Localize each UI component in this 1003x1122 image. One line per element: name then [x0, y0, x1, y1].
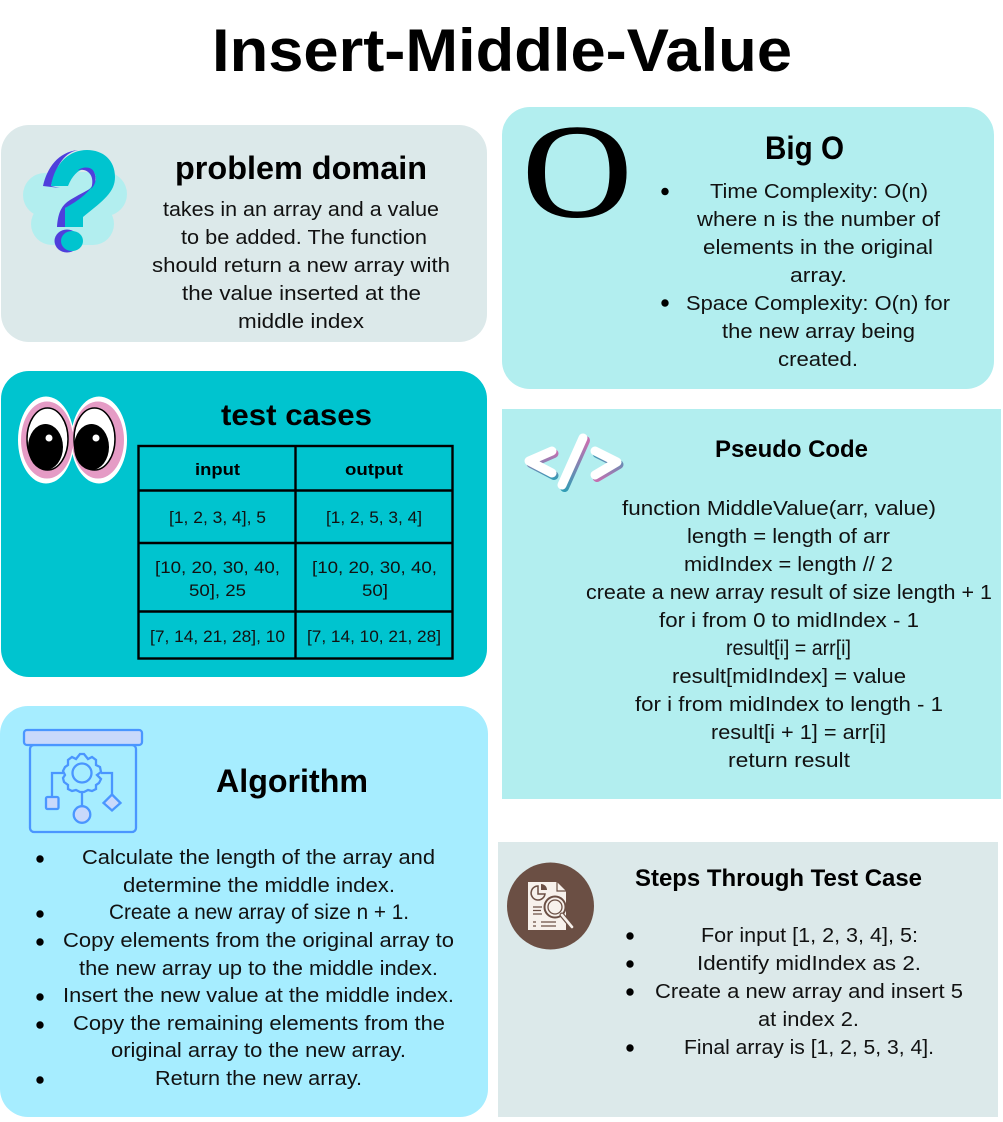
- heading: test cases: test cases: [221, 399, 372, 432]
- table: test cases: [1, 2, 3, 4], 5: [169, 509, 266, 527]
- table: test cases: 50]: [362, 582, 388, 600]
- icon: code brackets: [529, 438, 619, 488]
- text block: pseudo code: [586, 497, 992, 772]
- bullet list: algorithm steps: Copy elements from the original array to: [63, 929, 454, 952]
- panel: steps through test case: [498, 842, 998, 1117]
- bullet list: complexity: Space Complexity: O(n) for: [686, 292, 950, 315]
- table: test cases: [7, 14, 10, 21, 28]: [307, 628, 441, 646]
- bullet list: steps: Identify midIndex as 2.: [697, 952, 921, 975]
- heading: problem domain: problem domain: [175, 150, 427, 186]
- title: Insert-Middle-Value: [212, 17, 792, 84]
- bullet list: algorithm steps: [36, 846, 454, 1090]
- bullet list: steps: Final array is [1, 2, 5, 3, 4].: [684, 1036, 934, 1059]
- bullet list: complexity: [661, 180, 950, 371]
- bullet list: complexity: elements in the original: [703, 236, 933, 259]
- icon: question mark: [23, 150, 127, 252]
- text block: problem domain: should return a new array with: [152, 254, 450, 277]
- text block: pseudo code: for i from 0 to midIndex - 1: [659, 609, 919, 632]
- table: test cases: [138, 446, 453, 658]
- bullet list: steps: [626, 924, 963, 1059]
- panel: test cases: [1, 371, 487, 677]
- text block: pseudo code: result[i + 1] = arr[i]: [711, 721, 886, 744]
- table: test cases: input: [195, 461, 241, 479]
- text block: pseudo code: midIndex = length // 2: [684, 553, 893, 576]
- panel: problem domain: [1, 125, 487, 342]
- bullet list: complexity: the new array being: [722, 320, 915, 343]
- text block: pseudo code: function MiddleValue(arr, value): [622, 497, 936, 520]
- table: test cases: [1, 2, 5, 3, 4]: [326, 509, 422, 527]
- bullet list: algorithm steps: Calculate the length of the array and: [82, 846, 435, 869]
- text block: pseudo code: for i from midIndex to length - 1: [635, 693, 943, 716]
- table: test cases: 50], 25: [189, 582, 246, 600]
- panel: pseudo code: [502, 409, 1001, 799]
- heading: Big O: Big O: [765, 130, 844, 166]
- panel: algorithm: [0, 706, 488, 1117]
- icon: flowchart with gear: [24, 730, 142, 832]
- text block: problem domain: to be added. The function: [181, 226, 427, 249]
- text block: pseudo code: create a new array result of size length + 1: [586, 581, 992, 604]
- bullet list: complexity: array.: [790, 264, 847, 287]
- text block: pseudo code: result[i] = arr[i]: [726, 637, 851, 660]
- icon: big letter O: O: [522, 98, 632, 245]
- bullet list: algorithm steps: Insert the new value at the middle index.: [63, 984, 454, 1007]
- icon: eyes: [18, 396, 127, 484]
- bullet list: algorithm steps: determine the middle index.: [123, 874, 395, 897]
- table: test cases: output: [345, 461, 404, 479]
- bullet list: steps: For input [1, 2, 3, 4], 5:: [701, 924, 918, 947]
- bullet list: algorithm steps: original array to the new array.: [111, 1039, 406, 1062]
- text block: pseudo code: length = length of arr: [687, 525, 890, 548]
- bullet list: complexity: Time Complexity: O(n): [710, 180, 928, 203]
- bullet list: algorithm steps: the new array up to the middle index.: [79, 957, 438, 980]
- text block: pseudo code: result[midIndex] = value: [672, 665, 906, 688]
- heading: pseudo code: Pseudo Code: [715, 436, 868, 463]
- bullet list: algorithm steps: Return the new array.: [155, 1067, 362, 1090]
- text block: problem domain: [152, 198, 450, 333]
- bullet list: algorithm steps: Create a new array of size n + 1.: [109, 901, 409, 924]
- icon: document with magnifier: [507, 862, 594, 950]
- heading: algorithm: Algorithm: [216, 763, 368, 799]
- text block: pseudo code: return result: [728, 749, 850, 772]
- text block: problem domain: the value inserted at the: [182, 282, 421, 305]
- bullet list: complexity: created.: [778, 348, 858, 371]
- text block: problem domain: middle index: [238, 310, 365, 333]
- bullet list: steps: at index 2.: [758, 1008, 859, 1031]
- table: test cases: [10, 20, 30, 40,: [312, 559, 437, 577]
- bullet list: algorithm steps: Copy the remaining elements from the: [73, 1012, 445, 1035]
- panel: big O: [502, 98, 994, 389]
- bullet list: complexity: where n is the number of: [696, 208, 940, 231]
- heading: steps through test case: Steps Through Test Case: [635, 865, 922, 892]
- table: test cases: [7, 14, 21, 28], 10: [150, 628, 285, 646]
- table: test cases: [10, 20, 30, 40,: [155, 559, 280, 577]
- text block: problem domain: takes in an array and a value: [163, 198, 439, 221]
- bullet list: steps: Create a new array and insert 5: [655, 980, 963, 1003]
